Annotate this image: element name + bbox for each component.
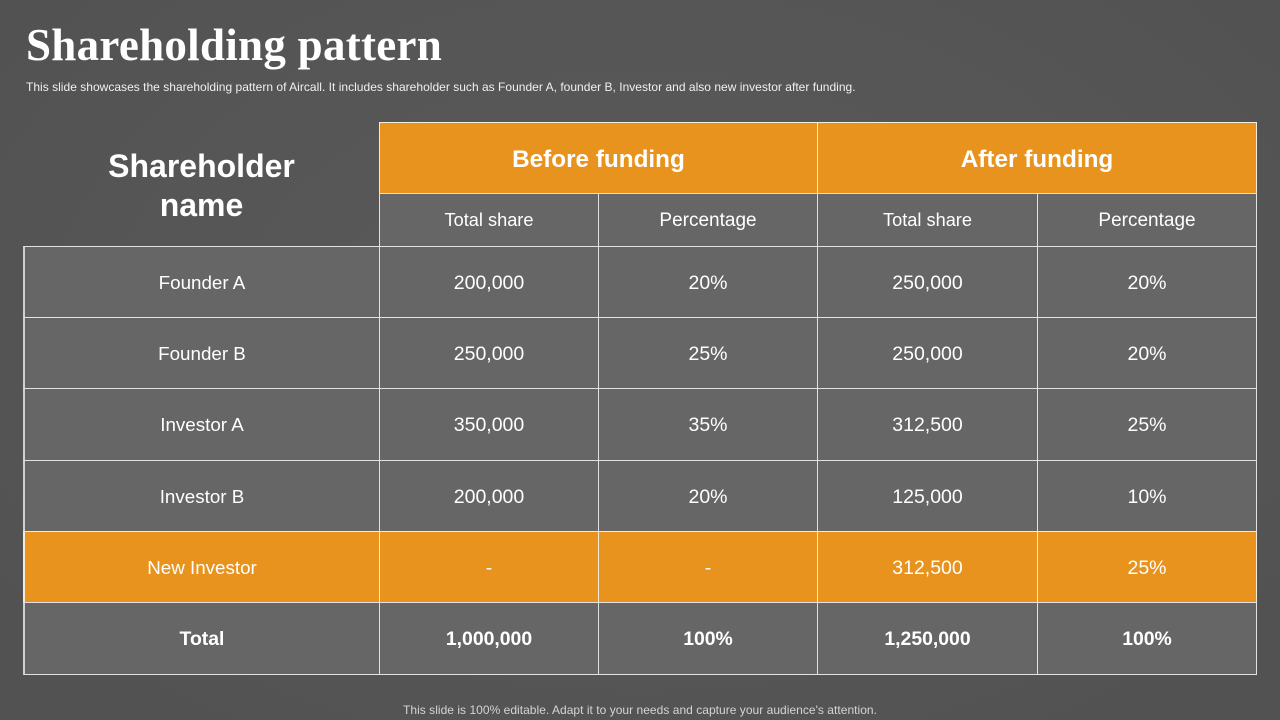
- column heading: shareholder name: [108, 148, 295, 223]
- row: New Investor (highlighted): -: [486, 556, 492, 578]
- sub-header row: Percentage: [659, 210, 757, 231]
- row: Total: 100%: [1122, 628, 1172, 650]
- row: Founder B: [23, 317, 1257, 388]
- row: Founder A: 20%: [1127, 272, 1167, 294]
- row: Total: [23, 602, 1257, 675]
- subtitle text: This slide showcases the shareholding pattern of Aircall. It includes shareholder such as Founder A, founder B, Investor and also new investor after funding.: [26, 80, 856, 94]
- row: Founder B: 250,000: [454, 342, 524, 364]
- sub-header row: [379, 193, 1257, 246]
- row: Founder A: Founder A: [159, 272, 245, 292]
- footer note: This slide is 100% editable. Adapt it to your needs and capture your audience's attention.: [403, 703, 877, 717]
- row: Founder A: 20%: [688, 272, 728, 294]
- row: Investor B: 10%: [1127, 486, 1167, 508]
- column heading: shareholder name: Shareholder: [108, 148, 295, 184]
- heading: after funding: After funding: [961, 146, 1113, 172]
- row: Investor B: Investor B: [160, 486, 244, 506]
- heading: before funding: Before funding: [512, 146, 685, 172]
- row: Founder A: 250,000: [892, 272, 963, 294]
- row: Investor A: 312,500: [892, 414, 963, 436]
- row: Investor B: 20%: [688, 486, 728, 508]
- sub-header row: Total share: [445, 210, 533, 230]
- row: New Investor (highlighted): [23, 531, 1257, 602]
- row: Investor A: 35%: [688, 414, 728, 436]
- shareholding table: [23, 122, 1257, 675]
- row: Total: 1,000,000: [446, 628, 532, 650]
- row: Investor A: [23, 388, 1257, 460]
- row: New Investor (highlighted): 312,500: [892, 556, 963, 578]
- row: New Investor (highlighted): 25%: [1127, 556, 1167, 578]
- row: Founder A: [23, 246, 1257, 317]
- row: New Investor (highlighted): -: [705, 556, 711, 578]
- row: Investor B: 125,000: [892, 486, 963, 508]
- row: Founder B: 250,000: [892, 342, 963, 364]
- sub-header row: Percentage: [1098, 210, 1196, 231]
- row: Investor A: 25%: [1127, 414, 1167, 436]
- row: Total: 100%: [683, 628, 733, 650]
- row: Investor A: Investor A: [160, 414, 244, 435]
- row: Founder B: 20%: [1127, 342, 1167, 364]
- heading: after funding: [817, 122, 1257, 194]
- row: Investor B: [23, 460, 1257, 531]
- row: Founder B: Founder B: [158, 342, 246, 364]
- row: Total: Total: [180, 628, 224, 650]
- row: Founder A: 200,000: [454, 272, 524, 294]
- row: Total: 1,250,000: [884, 628, 971, 650]
- sub-header row: Total share: [883, 210, 972, 230]
- row: Investor B: 200,000: [454, 486, 524, 508]
- row: New Investor (highlighted): New Investor: [147, 556, 257, 578]
- heading: before funding: [379, 122, 818, 194]
- row: Investor A: 350,000: [454, 414, 524, 436]
- title: Shareholding pattern: [26, 20, 442, 70]
- column heading: shareholder name: name: [160, 187, 243, 223]
- row: Founder B: 25%: [688, 342, 728, 364]
